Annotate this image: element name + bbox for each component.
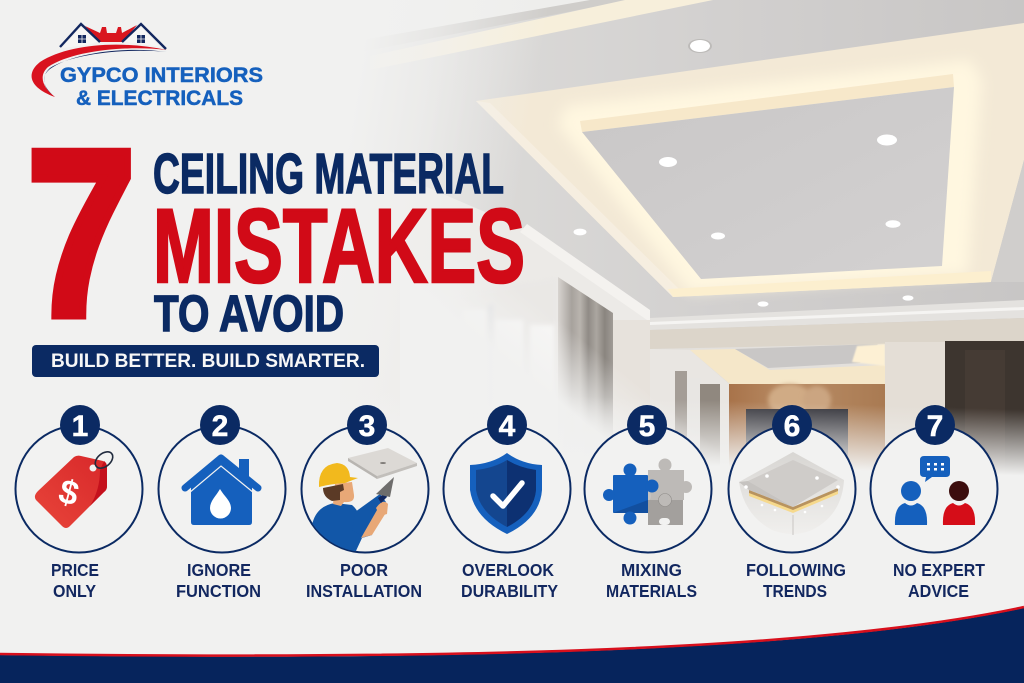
badge 4 [487, 405, 527, 445]
label 3: INSTALLATION [306, 581, 422, 601]
wall behind curtain [613, 320, 650, 490]
logo roofs [60, 24, 166, 49]
title line: mistakes: MISTAKES [153, 188, 525, 305]
ceiling photo [340, 0, 1024, 510]
label 6: TRENDS [763, 581, 827, 601]
label 2 [176, 560, 261, 601]
label 1: ONLY [53, 581, 96, 601]
label 4 [461, 560, 558, 601]
logo swoosh [44, 50, 167, 97]
badge 4: 4 [499, 410, 516, 443]
title line: ceiling material: CEILING MATERIAL [153, 142, 504, 206]
badge 6: 6 [784, 410, 800, 443]
item 6: following trends [728, 405, 856, 601]
sheer curtains [450, 277, 558, 420]
badge 3 [347, 405, 387, 445]
badge 5 [627, 405, 667, 445]
badge 2: 2 [212, 410, 228, 443]
icon: house with water drop [185, 458, 258, 525]
label 6: FOLLOWING [746, 560, 846, 580]
column [885, 342, 945, 490]
big number 7: 7 [26, 101, 136, 367]
badge 1: 1 [72, 410, 88, 443]
icon: worker plastering ceiling [311, 448, 417, 553]
recessed lights [688, 39, 712, 53]
logo [32, 24, 263, 110]
label 7: ADVICE [908, 581, 969, 601]
item 2: ignore function [158, 405, 286, 601]
label 6 [746, 560, 846, 601]
label 5: MIXING [621, 560, 682, 580]
icon: shield with check [470, 453, 542, 534]
label 5: MATERIALS [606, 581, 697, 601]
small curtains [675, 371, 687, 486]
label 3 [306, 560, 422, 601]
fade overlays [340, 0, 600, 500]
crown moulding [650, 300, 1024, 330]
item 1: price only [16, 405, 142, 601]
logo: & ELECTRICALS [76, 86, 243, 110]
icon: price tag [35, 449, 116, 528]
badge 3: 3 [359, 410, 375, 443]
title [153, 142, 525, 342]
badge 7: 7 [927, 410, 943, 443]
tray ceiling [476, 23, 1024, 297]
label 1 [51, 560, 99, 601]
label 3: POOR [340, 560, 388, 580]
label 2: FUNCTION [176, 581, 261, 601]
icon: price tag: $ [55, 472, 83, 514]
wood wall [729, 384, 885, 490]
badge 1 [60, 405, 100, 445]
beam [650, 318, 1024, 349]
badge 5: 5 [639, 410, 655, 443]
label 4: OVERLOOK [462, 560, 554, 580]
label 5 [606, 560, 697, 601]
back room ceiling [650, 344, 885, 384]
icon: puzzle pieces [603, 458, 692, 525]
label 1: PRICE [51, 560, 99, 580]
label 7 [893, 560, 985, 601]
label 4: DURABILITY [461, 581, 558, 601]
badge 2 [200, 405, 240, 445]
item 4: overlook durability [444, 405, 570, 601]
TV [746, 409, 848, 489]
dark panel [945, 341, 1024, 490]
tagline pill [32, 345, 379, 377]
footer wave [0, 607, 1024, 683]
tagline pill: BUILD BETTER. BUILD SMARTER. [51, 350, 365, 372]
title line: to avoid: TO AVOID [154, 285, 344, 342]
badge 6 [772, 405, 812, 445]
wall and crown [340, 150, 650, 490]
label 2: IGNORE [187, 560, 251, 580]
item 5: mixing materials [584, 405, 712, 601]
icon: two people talking [895, 456, 975, 525]
logo text: GYPCO INTERIORS [60, 63, 263, 87]
item 7: no expert advice [870, 405, 998, 601]
main curtain [558, 277, 613, 490]
badge 7 [915, 405, 955, 445]
icon: tray ceiling section [739, 452, 844, 535]
item 3: poor installation [302, 405, 428, 601]
label 7: NO EXPERT [893, 560, 985, 580]
